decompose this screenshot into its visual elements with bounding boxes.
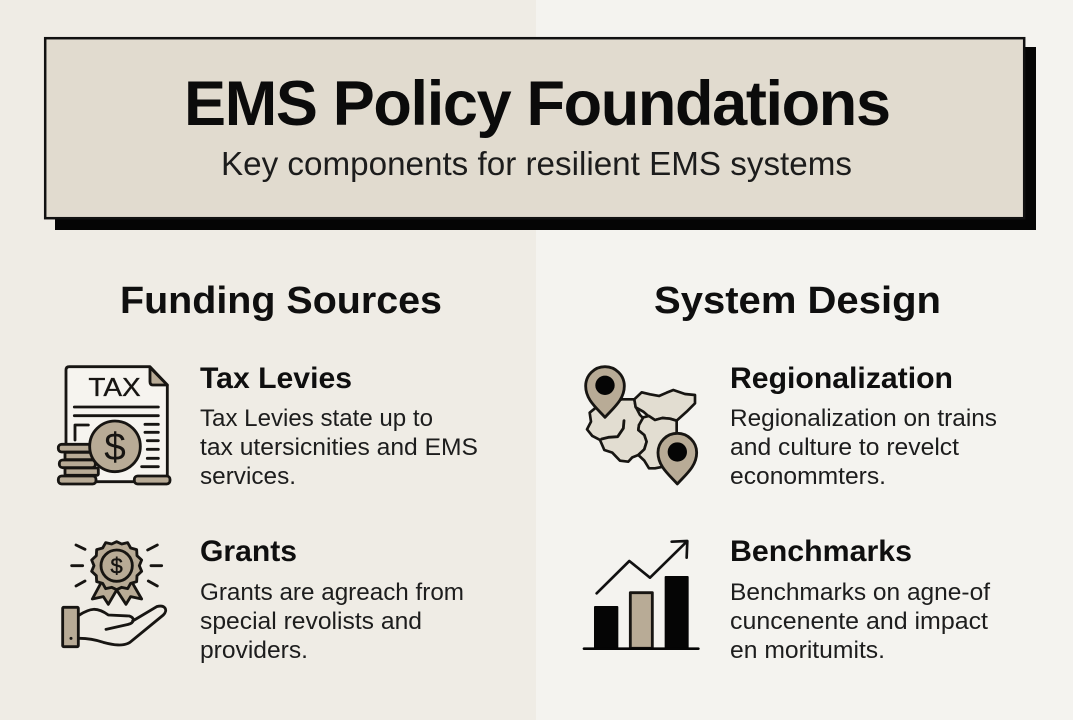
heading: system design: System Design <box>654 280 941 322</box>
item body <box>200 579 464 664</box>
panel: funding sources <box>58 280 478 664</box>
item body: Benchmarks on agne-of <box>730 579 990 606</box>
item body: tax utersicnities and EMS <box>200 434 478 461</box>
item title: Tax Levies <box>200 362 352 395</box>
panel: system design <box>584 280 997 664</box>
item body: en moritumits. <box>730 637 885 664</box>
item body: and culture to revelct <box>730 434 959 461</box>
heading: funding sources: Funding Sources <box>120 280 442 322</box>
icon: award ribbon over open hand <box>63 542 166 647</box>
title banner <box>45 38 1036 230</box>
item body: special revolists and <box>200 608 422 635</box>
item: grants <box>200 535 464 664</box>
icon: region map with pins <box>586 367 697 484</box>
item body <box>730 405 997 490</box>
item: regionalization <box>730 362 997 490</box>
item title: Benchmarks <box>730 535 912 568</box>
icon: tax document with coins: $ <box>104 426 126 469</box>
item body <box>200 405 478 490</box>
item: tax levies <box>200 362 478 490</box>
item body: Grants are agreach from <box>200 579 464 606</box>
title: EMS Policy Foundations <box>184 69 891 139</box>
icon: award ribbon over open hand: $ <box>111 554 123 579</box>
item body: Tax Levies state up to <box>200 405 433 432</box>
item body: Regionalization on trains <box>730 405 997 432</box>
item body: econommters. <box>730 463 886 490</box>
item title: Regionalization <box>730 362 953 395</box>
item body <box>730 579 990 664</box>
item body: cuncenente and impact <box>730 608 988 635</box>
item: benchmarks <box>730 535 990 664</box>
icon: tax document with coins: TAX <box>88 374 141 402</box>
subtitle: Key components for resilient EMS systems <box>221 145 852 182</box>
item body: services. <box>200 463 296 490</box>
item body: providers. <box>200 637 308 664</box>
item title: Grants <box>200 535 297 568</box>
icon: bar chart with rising arrow <box>584 541 698 649</box>
icon: tax document with coins <box>58 367 170 484</box>
